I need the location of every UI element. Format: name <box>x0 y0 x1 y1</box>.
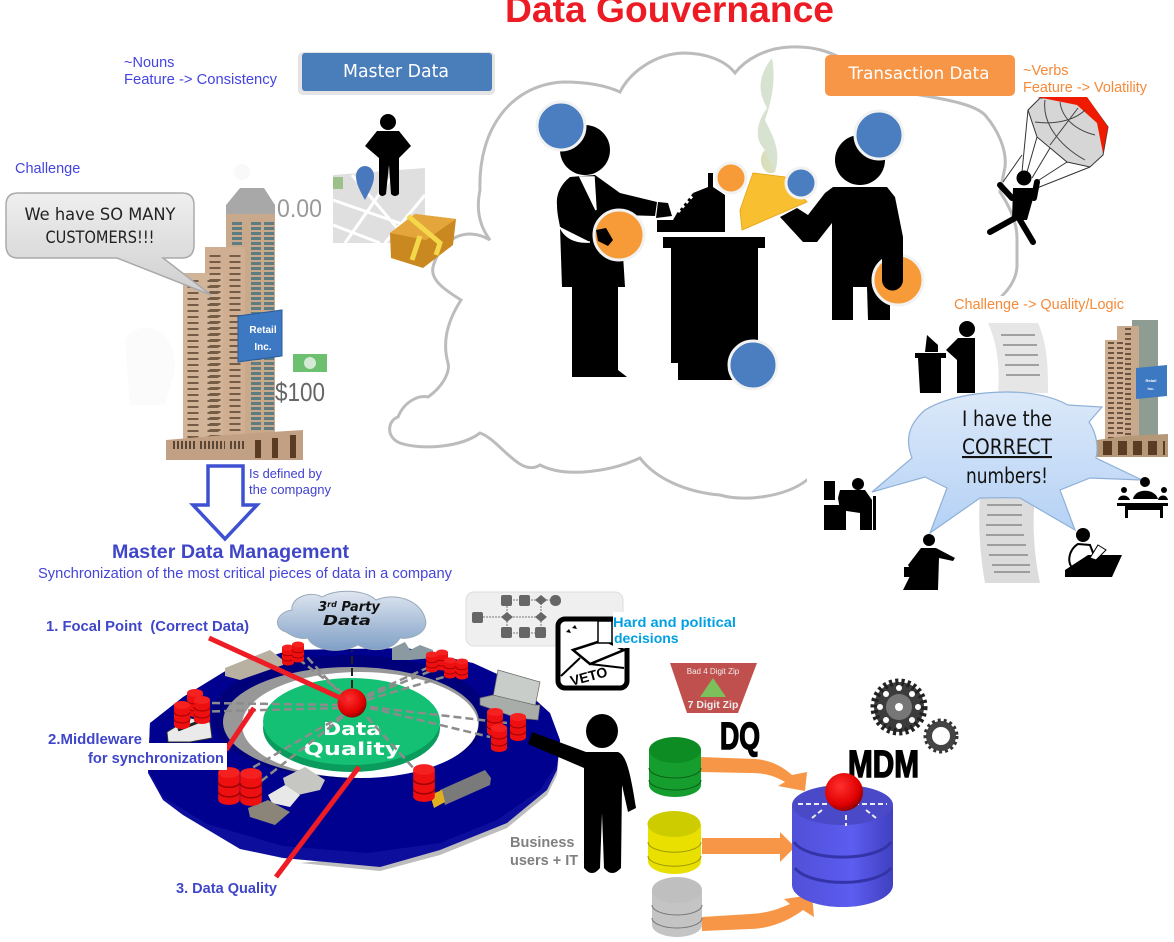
defined by note: Is defined by <box>249 467 323 481</box>
transaction data button <box>825 55 1015 96</box>
3rd party data cloud: rd <box>327 600 337 609</box>
bubble text: numbers! <box>966 464 1048 488</box>
fingers on register <box>656 202 672 218</box>
3rd party data cloud: 3 <box>318 600 327 615</box>
heading: master data management: Master Data Management <box>112 541 350 563</box>
business users note: users + IT <box>510 853 578 869</box>
icon: parcel box <box>390 214 456 268</box>
icon: retail building: Retail <box>249 325 277 336</box>
panel: transaction thought cloud <box>390 47 1017 498</box>
callout: so many customers: CUSTOMERS!!! <box>46 228 154 248</box>
bubble text: I have the <box>962 407 1052 431</box>
transaction data button: Transaction Data <box>848 64 990 84</box>
transaction notes: ~Verbs <box>1023 63 1069 79</box>
bubble text <box>962 407 1052 488</box>
red database stacks <box>174 642 526 806</box>
mini building <box>1097 320 1168 457</box>
gray database <box>652 877 702 937</box>
challenge label: Challenge <box>15 161 80 177</box>
defined by note: the compagny <box>249 483 332 497</box>
defined by note <box>249 467 332 497</box>
icon: parachute <box>990 97 1108 242</box>
icon: retail building <box>166 188 303 460</box>
steam <box>758 58 777 172</box>
data quality label: Data <box>323 719 381 740</box>
icon: banknote <box>293 354 327 372</box>
focal point ball <box>338 688 366 718</box>
business users note <box>510 835 578 869</box>
master data button: Master Data <box>343 61 449 82</box>
master data notes: ~Nouns <box>124 55 174 71</box>
business users note: Business <box>510 835 574 851</box>
speech bubble <box>872 392 1142 533</box>
arrow: down to MDM <box>193 466 257 539</box>
panel: conflicting numbers <box>807 320 1174 605</box>
callout: so many customers: We have SO MANY <box>24 205 176 225</box>
icon: map with pin <box>333 166 425 243</box>
green disc <box>263 678 440 772</box>
yellow database <box>648 811 701 874</box>
hard and political decisions note: Hard and political <box>613 614 736 630</box>
cheese <box>740 173 807 230</box>
3rd party data cloud: Party <box>337 600 380 615</box>
icon: veto: VETO <box>568 664 609 689</box>
customer hand over marker <box>882 237 903 290</box>
platform top <box>148 648 560 853</box>
callout: so many customers <box>6 193 211 295</box>
DQ rule card <box>670 663 757 713</box>
hard and political decisions note: decisions <box>614 630 679 646</box>
cloud outline <box>390 47 1017 498</box>
blue marker circles <box>537 102 903 389</box>
left shopkeeper head <box>560 125 610 175</box>
transaction notes <box>1023 63 1148 96</box>
icon: pointing person <box>528 714 636 873</box>
DQ label: DQ <box>720 716 760 758</box>
master data button <box>298 52 495 95</box>
report page top <box>988 323 1048 393</box>
challenge quality logic label: Challenge -> Quality/Logic <box>954 297 1124 313</box>
red pointer lines <box>209 638 359 877</box>
platform side <box>148 723 560 867</box>
DQ rule card: Bad 4 Digit Zip <box>687 667 740 676</box>
label: middleware <box>48 732 224 767</box>
white well <box>242 672 478 778</box>
icon: veto <box>558 619 627 689</box>
label: data quality: 3. Data Quality <box>176 881 277 897</box>
icon: retail building: Inc. <box>254 342 272 353</box>
green database <box>649 737 701 797</box>
customer head <box>835 135 885 185</box>
register keys <box>678 194 694 212</box>
label: focal point: 1. Focal Point (Correct Data) <box>46 619 249 635</box>
icon: call-centre agent <box>824 478 876 530</box>
white backing <box>807 320 1174 605</box>
site buildings <box>167 642 540 825</box>
data quality label: Quality <box>304 739 401 760</box>
cash register <box>657 173 725 232</box>
master blue database <box>792 773 893 907</box>
faint background marks <box>125 164 250 405</box>
hand on orange marker <box>596 228 613 246</box>
label backing <box>147 743 227 770</box>
3rd party data cloud <box>277 591 426 650</box>
subheading: Synchronization of the most critical pieces of data in a company <box>38 566 453 582</box>
hard and political decisions note <box>613 612 736 648</box>
recessed shadow ring <box>212 655 488 779</box>
label: middleware: for synchronization <box>88 751 224 767</box>
orange arrows <box>700 757 814 931</box>
MDM label: MDM <box>848 744 919 786</box>
inner ring <box>223 667 479 777</box>
panel: DQ to MDM flow <box>648 663 957 937</box>
steam over cheese <box>761 150 775 173</box>
counter <box>663 237 765 380</box>
amount $100: $100 <box>275 377 325 407</box>
3rd party data cloud: Data <box>323 614 371 629</box>
amount 0.00: 0.00 <box>277 195 322 223</box>
label: middleware: 2.Middleware <box>48 732 142 748</box>
edge shadow <box>300 745 560 871</box>
sync lines <box>190 650 507 782</box>
DQ rule card: 7 Digit Zip <box>688 699 738 711</box>
data quality label <box>304 719 401 760</box>
challenge quality logic label <box>950 296 1130 321</box>
shirt gap <box>560 177 596 242</box>
process flow card <box>466 592 623 646</box>
transaction notes: Feature -> Volatility <box>1023 80 1148 96</box>
orange marker circles <box>594 163 923 305</box>
master data notes <box>124 55 278 88</box>
right customer silhouette <box>780 187 903 320</box>
icon: businessman with case <box>903 534 955 590</box>
mini building: Retail <box>1146 378 1156 383</box>
panel: MDM platform diagram <box>148 591 560 877</box>
mini building: Inc. <box>1148 386 1154 391</box>
icon: reader with document <box>1065 528 1122 577</box>
bubble text: CORRECT <box>962 435 1052 459</box>
icon: cashier <box>915 321 975 393</box>
master data notes: Feature -> Consistency <box>124 72 278 88</box>
report page bottom <box>979 495 1040 583</box>
gears <box>874 682 957 752</box>
icon: master data person <box>365 114 411 196</box>
left shopkeeper silhouette <box>557 175 657 377</box>
icon: meeting group <box>1117 477 1168 518</box>
